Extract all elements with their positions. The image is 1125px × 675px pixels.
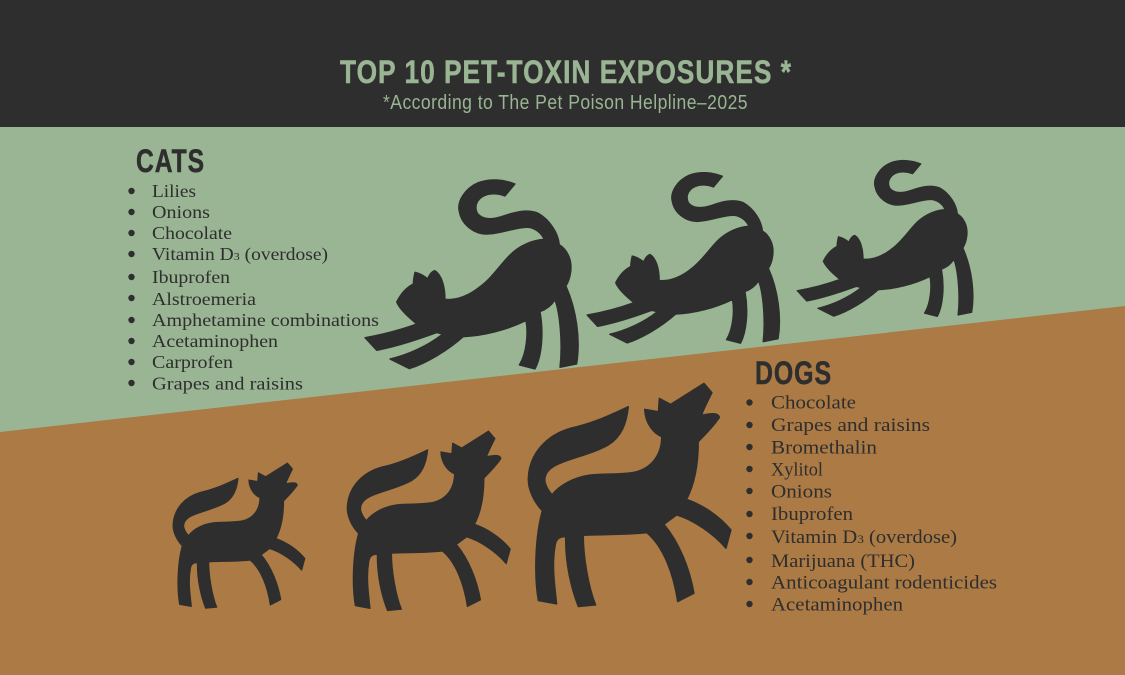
list items: dogs: Xylitol	[771, 461, 823, 481]
subtitle: *According to The Pet Poison Helpline–2025	[383, 92, 748, 114]
panel: dogs background	[0, 306, 1125, 675]
list items: cats: Grapes and raisins	[152, 374, 303, 394]
list items: dogs: Ibuprofen	[771, 505, 853, 525]
icon: small cat	[797, 160, 973, 316]
list items: dogs: Anticoagulant rodenticides	[771, 574, 997, 594]
list items: dogs: Bromethalin	[771, 439, 877, 459]
icon: large cat	[365, 180, 578, 369]
list items: cats: Ibuprofen	[152, 267, 230, 287]
panel: dogs list	[746, 355, 997, 616]
list items: dogs: Chocolate	[771, 394, 856, 414]
icon: small dog	[173, 463, 305, 608]
list items: cats: Onions	[152, 202, 210, 222]
icon: medium dog	[347, 431, 510, 611]
icon: medium cat	[587, 173, 780, 343]
list items: cats: Vitamin D 3 (overdose)	[152, 244, 328, 264]
title: TOP 10 PET-TOXIN EXPOSURES *	[340, 54, 792, 90]
icon: large dog	[528, 383, 731, 607]
list items: dogs	[771, 394, 997, 616]
heading: dogs: DOGS	[755, 355, 832, 391]
header band	[0, 0, 1125, 127]
bullets: dogs	[746, 399, 753, 607]
list items: cats: Lilies	[152, 181, 196, 201]
bullets: cats	[128, 188, 135, 386]
list items: dogs: Grapes and raisins	[771, 416, 930, 436]
list items: cats: Alstroemeria	[152, 289, 256, 309]
list items: cats: Chocolate	[152, 223, 232, 243]
list items: cats	[152, 181, 379, 394]
list items: dogs: Vitamin D 3 (overdose)	[771, 528, 957, 548]
panel: cats list	[128, 143, 379, 394]
heading: cats: CATS	[136, 143, 205, 179]
list items: dogs: Acetaminophen	[771, 596, 903, 616]
list items: cats: Amphetamine combinations	[152, 310, 379, 330]
list items: cats: Carprofen	[152, 352, 233, 372]
list items: dogs: Onions	[771, 482, 832, 502]
list items: cats: Acetaminophen	[152, 331, 278, 351]
list items: dogs: Marijuana (THC)	[771, 552, 915, 572]
